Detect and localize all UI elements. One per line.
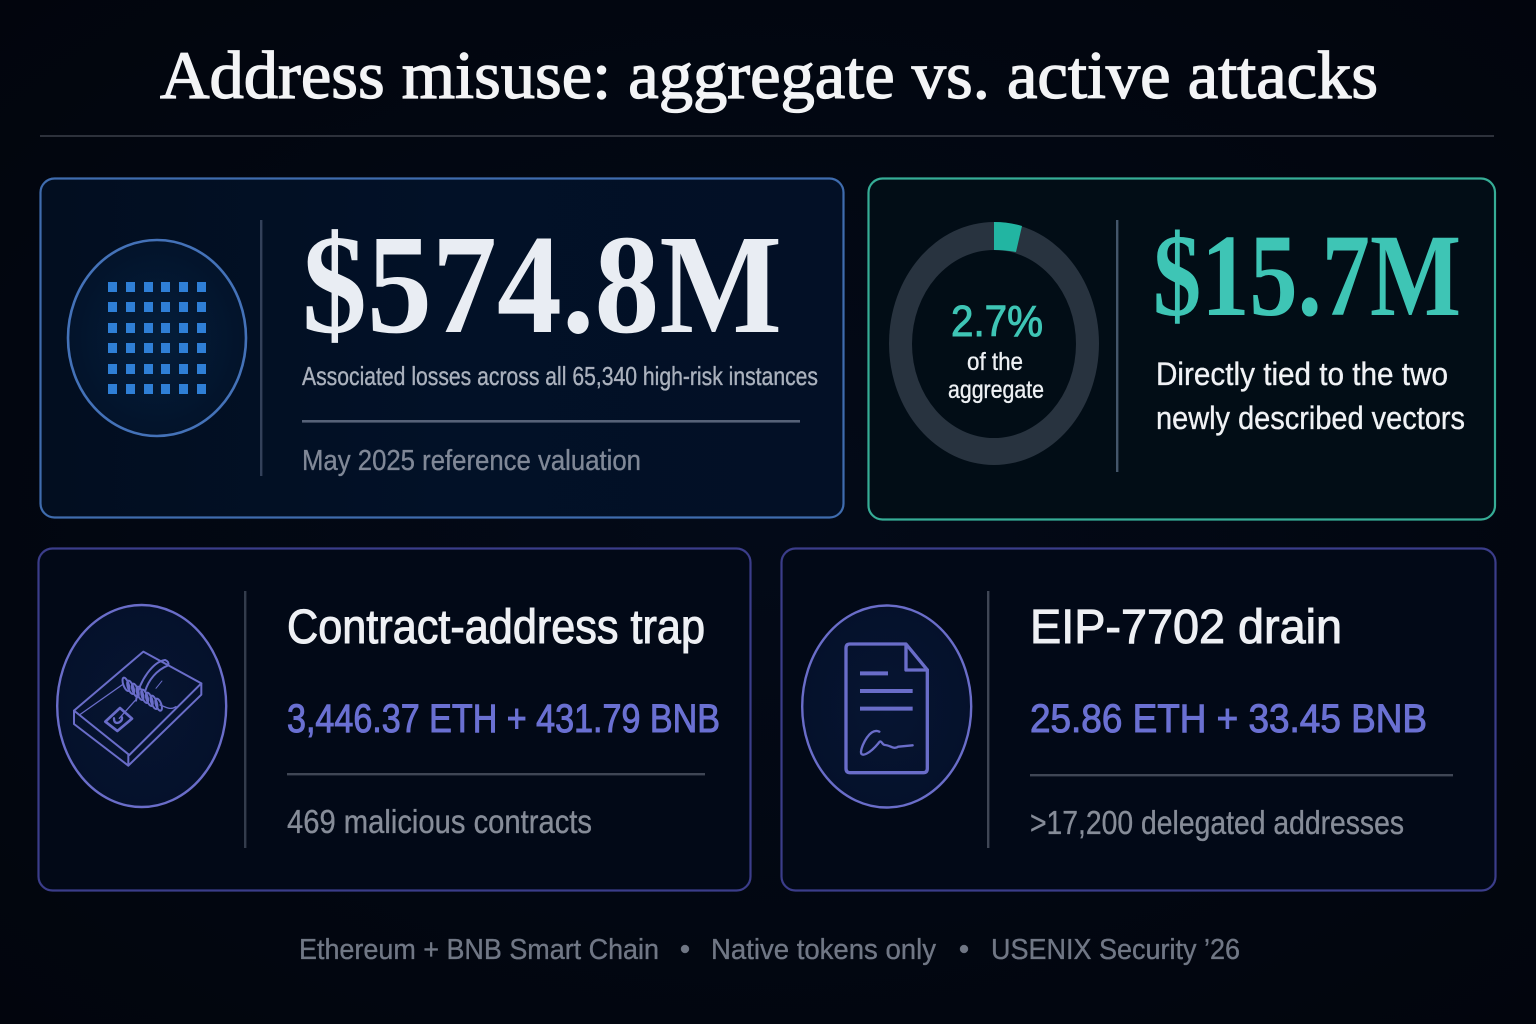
footer: USENIX Security ’26 — [991, 934, 1240, 966]
note: malicious contracts: 469 malicious contracts — [287, 803, 592, 840]
panel: EIP-7702 drain — [782, 548, 1496, 890]
donut caption: of the — [967, 348, 1023, 376]
heading: EIP-7702 drain: EIP-7702 drain — [1030, 601, 1342, 654]
panel: direct losses — [868, 178, 1495, 520]
footer — [299, 934, 1240, 966]
description: associated losses: Associated losses across all 65,340 high-risk instances — [302, 361, 818, 391]
description: two vectors: newly described vectors — [1156, 400, 1465, 436]
footer: Ethereum + BNB Smart Chain — [299, 934, 659, 966]
icon: grid of instances — [68, 240, 246, 436]
donut caption — [948, 348, 1044, 404]
note: valuation date: May 2025 reference valuation — [302, 445, 641, 477]
big number: direct losses: $15.7M — [1153, 210, 1461, 341]
donut chart: 2.7 percent share — [889, 222, 1099, 465]
big number: total losses: $574.8M — [302, 205, 782, 363]
donut value: 2.7% — [951, 297, 1043, 346]
note: delegated addresses: >17,200 delegated addresses — [1030, 804, 1404, 841]
description: two vectors — [1156, 356, 1465, 436]
panel: aggregate losses — [40, 178, 844, 518]
panel: contract-address trap — [38, 548, 750, 890]
value: trap amounts: 3,446.37 ETH + 431.79 BNB — [287, 697, 720, 741]
donut caption: aggregate — [948, 376, 1044, 404]
heading: contract-address trap: Contract-address trap — [287, 601, 705, 654]
icon: signed document — [802, 606, 971, 808]
icon: mousetrap — [57, 605, 226, 807]
title: Address misuse: aggregate vs. active attacks — [160, 37, 1378, 113]
value: drain amounts: 25.86 ETH + 33.45 BNB — [1030, 697, 1427, 741]
footer: Native tokens only — [711, 934, 936, 966]
description: two vectors: Directly tied to the two — [1156, 356, 1448, 392]
